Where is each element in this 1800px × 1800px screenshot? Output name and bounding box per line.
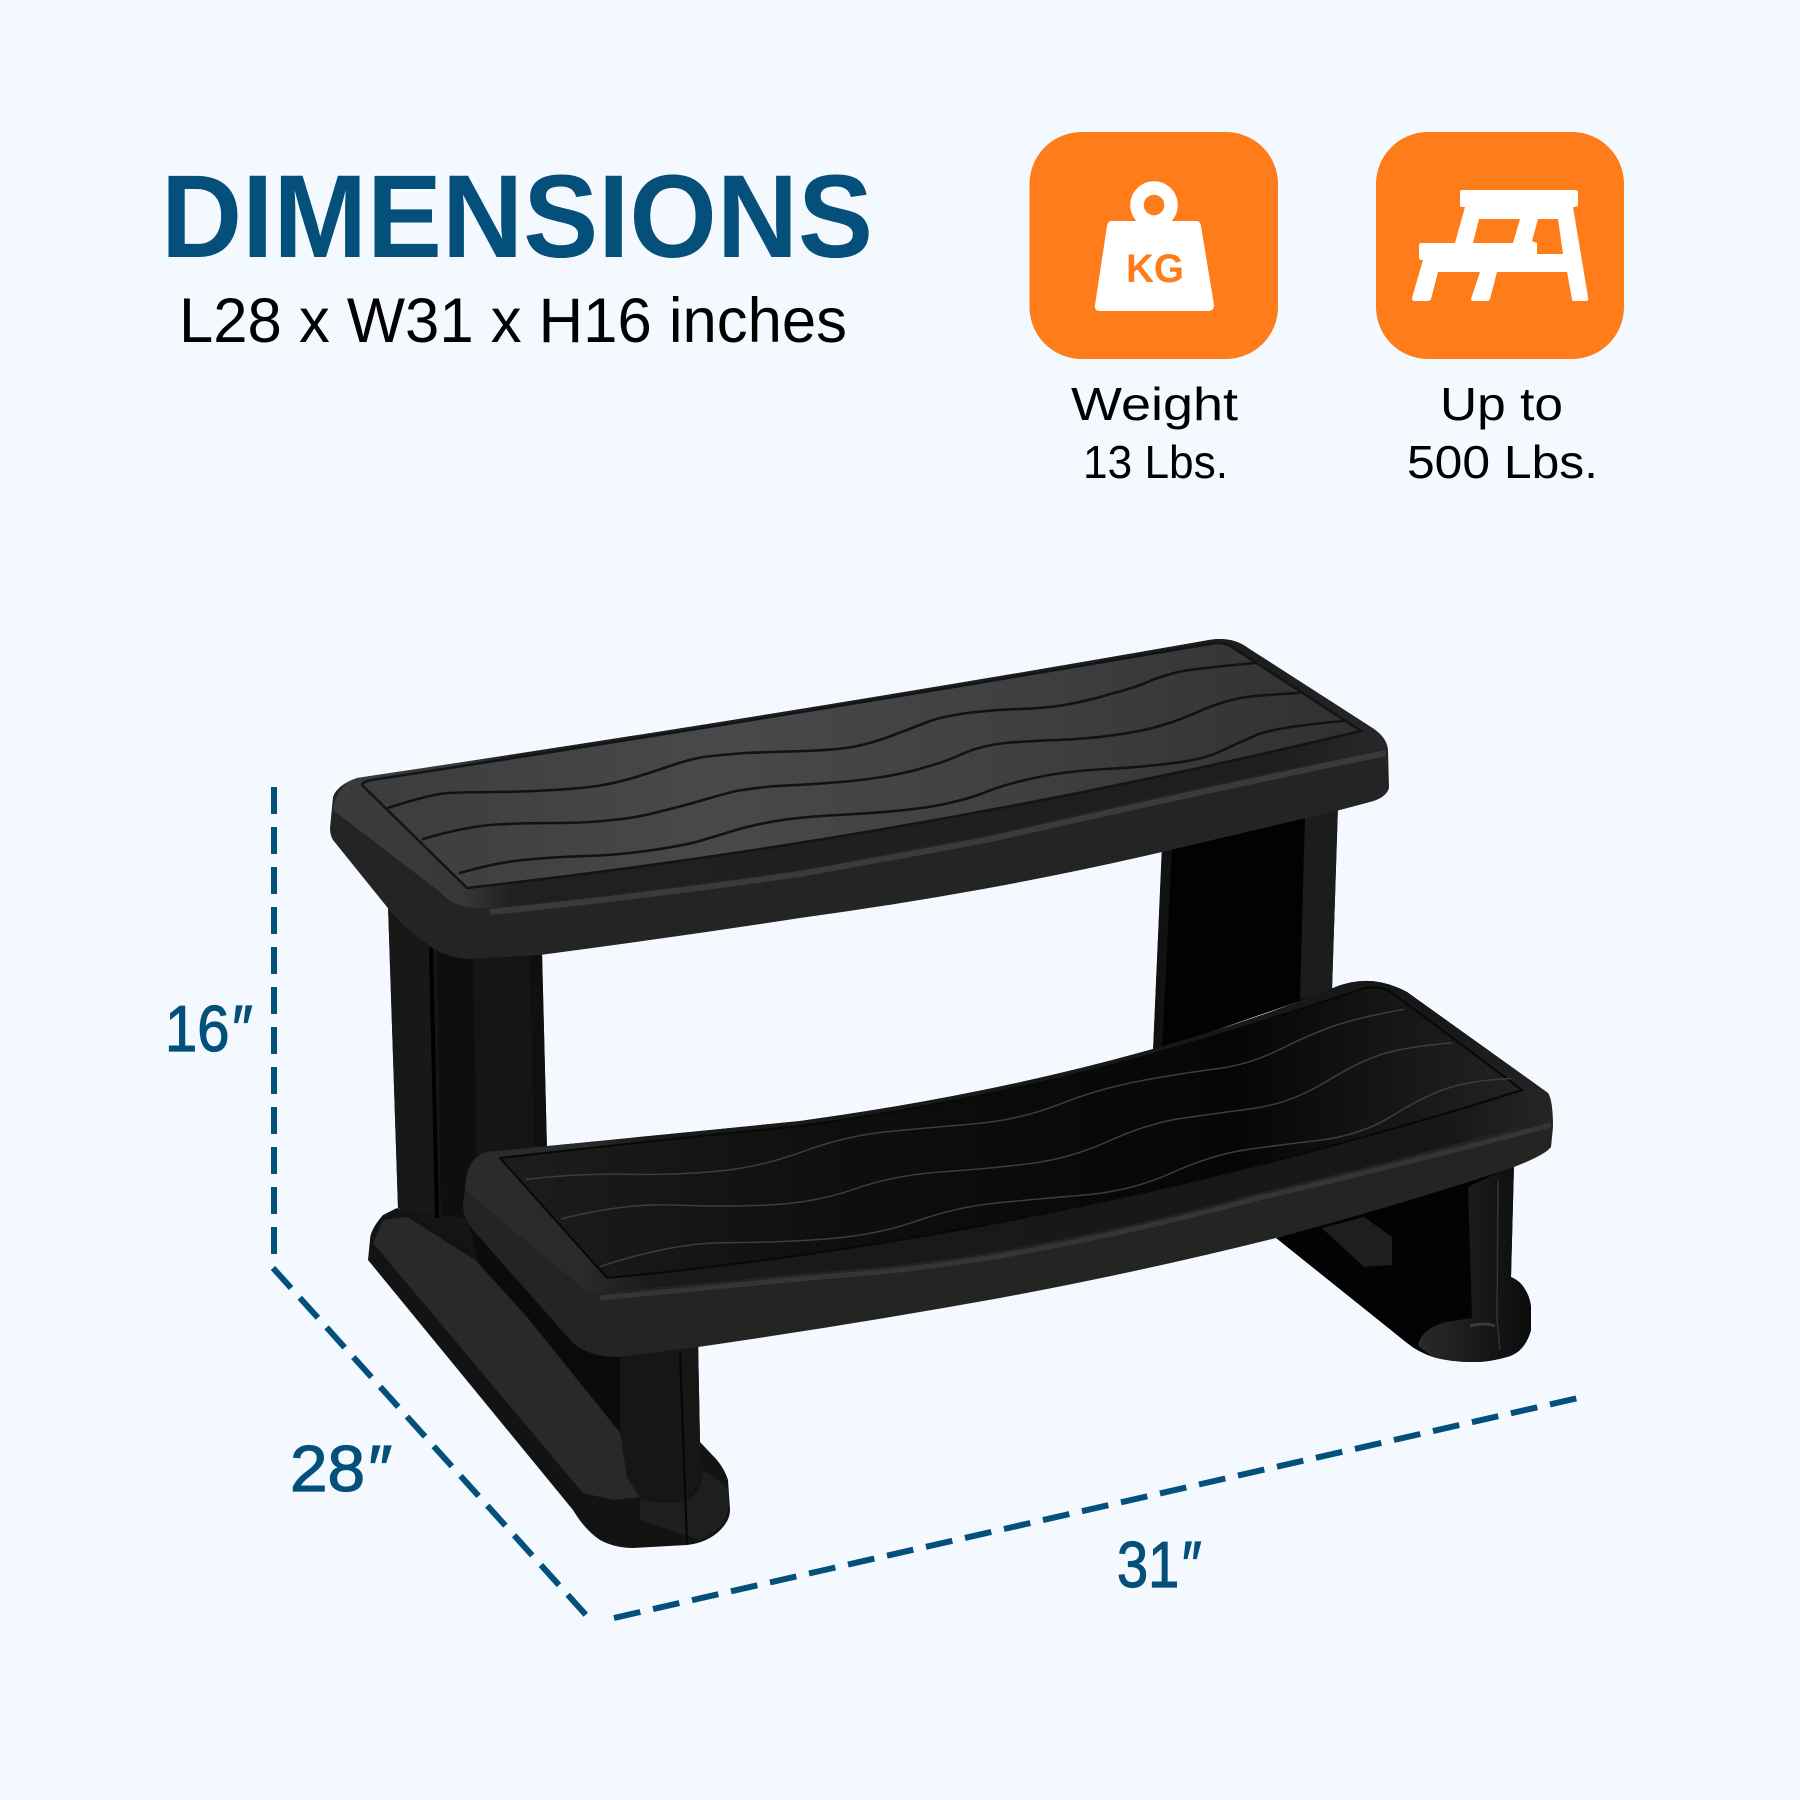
capacity spec (1376, 132, 1624, 488)
lower leg, left (575, 1340, 703, 1500)
dimension line: height (271, 787, 277, 1256)
step body (463, 981, 1553, 1357)
shadowed gap under lower step (467, 1215, 622, 1435)
foot rail, left (368, 1208, 730, 1548)
icon: bench tile (1376, 132, 1624, 359)
foot rail and lower leg, right (1276, 1165, 1531, 1362)
step body (330, 639, 1389, 959)
weight spec (1030, 132, 1278, 488)
icon: weight tile: KG (1126, 247, 1184, 291)
title: DIMENSIONS (161, 151, 873, 283)
label: capacity: 500 Lbs. (1407, 436, 1598, 488)
icon: weight tile (1030, 132, 1278, 359)
step rim (465, 981, 1552, 1292)
label: capacity (1407, 378, 1598, 488)
dimension line: width (614, 1398, 1578, 1618)
dimension label: height: 16″ (165, 992, 252, 1065)
tread wave grooves (526, 1009, 1510, 1266)
dimension line: length (273, 1268, 586, 1615)
tread surface (362, 643, 1361, 888)
front leg of top step (388, 905, 547, 1290)
top step (330, 639, 1389, 959)
step rim (333, 639, 1386, 908)
label: weight: Weight (1071, 378, 1238, 430)
tread wave grooves (388, 663, 1343, 873)
product: spa steps (330, 639, 1553, 1548)
rear leg of top step (1153, 805, 1338, 1052)
tread surface (500, 987, 1522, 1278)
rail top face (373, 1217, 640, 1500)
label: capacity: Up to (1440, 378, 1563, 430)
lower step (463, 981, 1553, 1357)
label: weight (1071, 378, 1238, 488)
dimension label: length: 28″ (290, 1432, 391, 1505)
dimension label: width: 31″ (1117, 1528, 1201, 1601)
subtitle: overall dimensions: L28 x W31 x H16 inches (179, 286, 847, 356)
label: weight: 13 Lbs. (1083, 436, 1228, 488)
